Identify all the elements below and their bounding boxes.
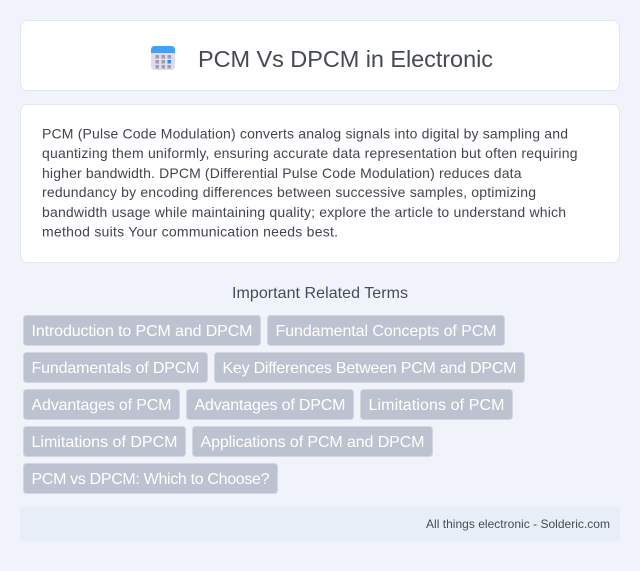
tag (24, 316, 260, 346)
tag: Advantages of PCM (32, 397, 172, 414)
summary text: method suits Your communication needs best. (42, 224, 338, 240)
tag: Advantages of DPCM (194, 397, 346, 414)
tag (360, 390, 512, 420)
tag: Limitations of PCM (368, 397, 504, 414)
title: PCM Vs DPCM in Electronic (198, 46, 493, 72)
panel: summary (20, 104, 620, 262)
tag (268, 316, 504, 346)
tag: Fundamental Concepts of PCM (276, 323, 496, 340)
tag: Limitations of DPCM (32, 434, 178, 451)
summary text: higher bandwidth. DPCM (Differential Pulse Code Modulation) reduces data (42, 165, 522, 181)
summary text: bandwidth usage while maintaining quality; explore the article to understand which (42, 204, 566, 220)
tag: Applications of PCM and DPCM (200, 434, 424, 451)
tag (24, 390, 180, 420)
tag: Key Differences Between PCM and DPCM (222, 360, 516, 377)
tag (24, 464, 278, 494)
summary text: PCM (Pulse Code Modulation) converts analog signals into digital by sampling and (42, 126, 568, 142)
summary text: redundancy by encoding differences between successive samples, optimizing (42, 184, 536, 200)
tag (214, 352, 524, 382)
summary text (42, 126, 578, 240)
panel: related term tags (24, 316, 524, 494)
tag (24, 352, 208, 382)
tag (186, 390, 354, 420)
tag: Fundamentals of DPCM (32, 360, 200, 377)
tag: PCM vs DPCM: Which to Choose? (32, 471, 270, 488)
tag (24, 426, 186, 456)
tag (192, 426, 432, 456)
tag: Introduction to PCM and DPCM (32, 323, 252, 340)
footer credit: All things electronic - Solderic.com (426, 517, 610, 531)
summary text: quantizing them uniformly, ensuring accurate data representation but often requiring (42, 145, 578, 161)
heading: related terms: Important Related Terms (232, 285, 408, 302)
footer band (20, 507, 620, 541)
panel: title header (20, 20, 620, 90)
icon: calendar (151, 46, 175, 70)
